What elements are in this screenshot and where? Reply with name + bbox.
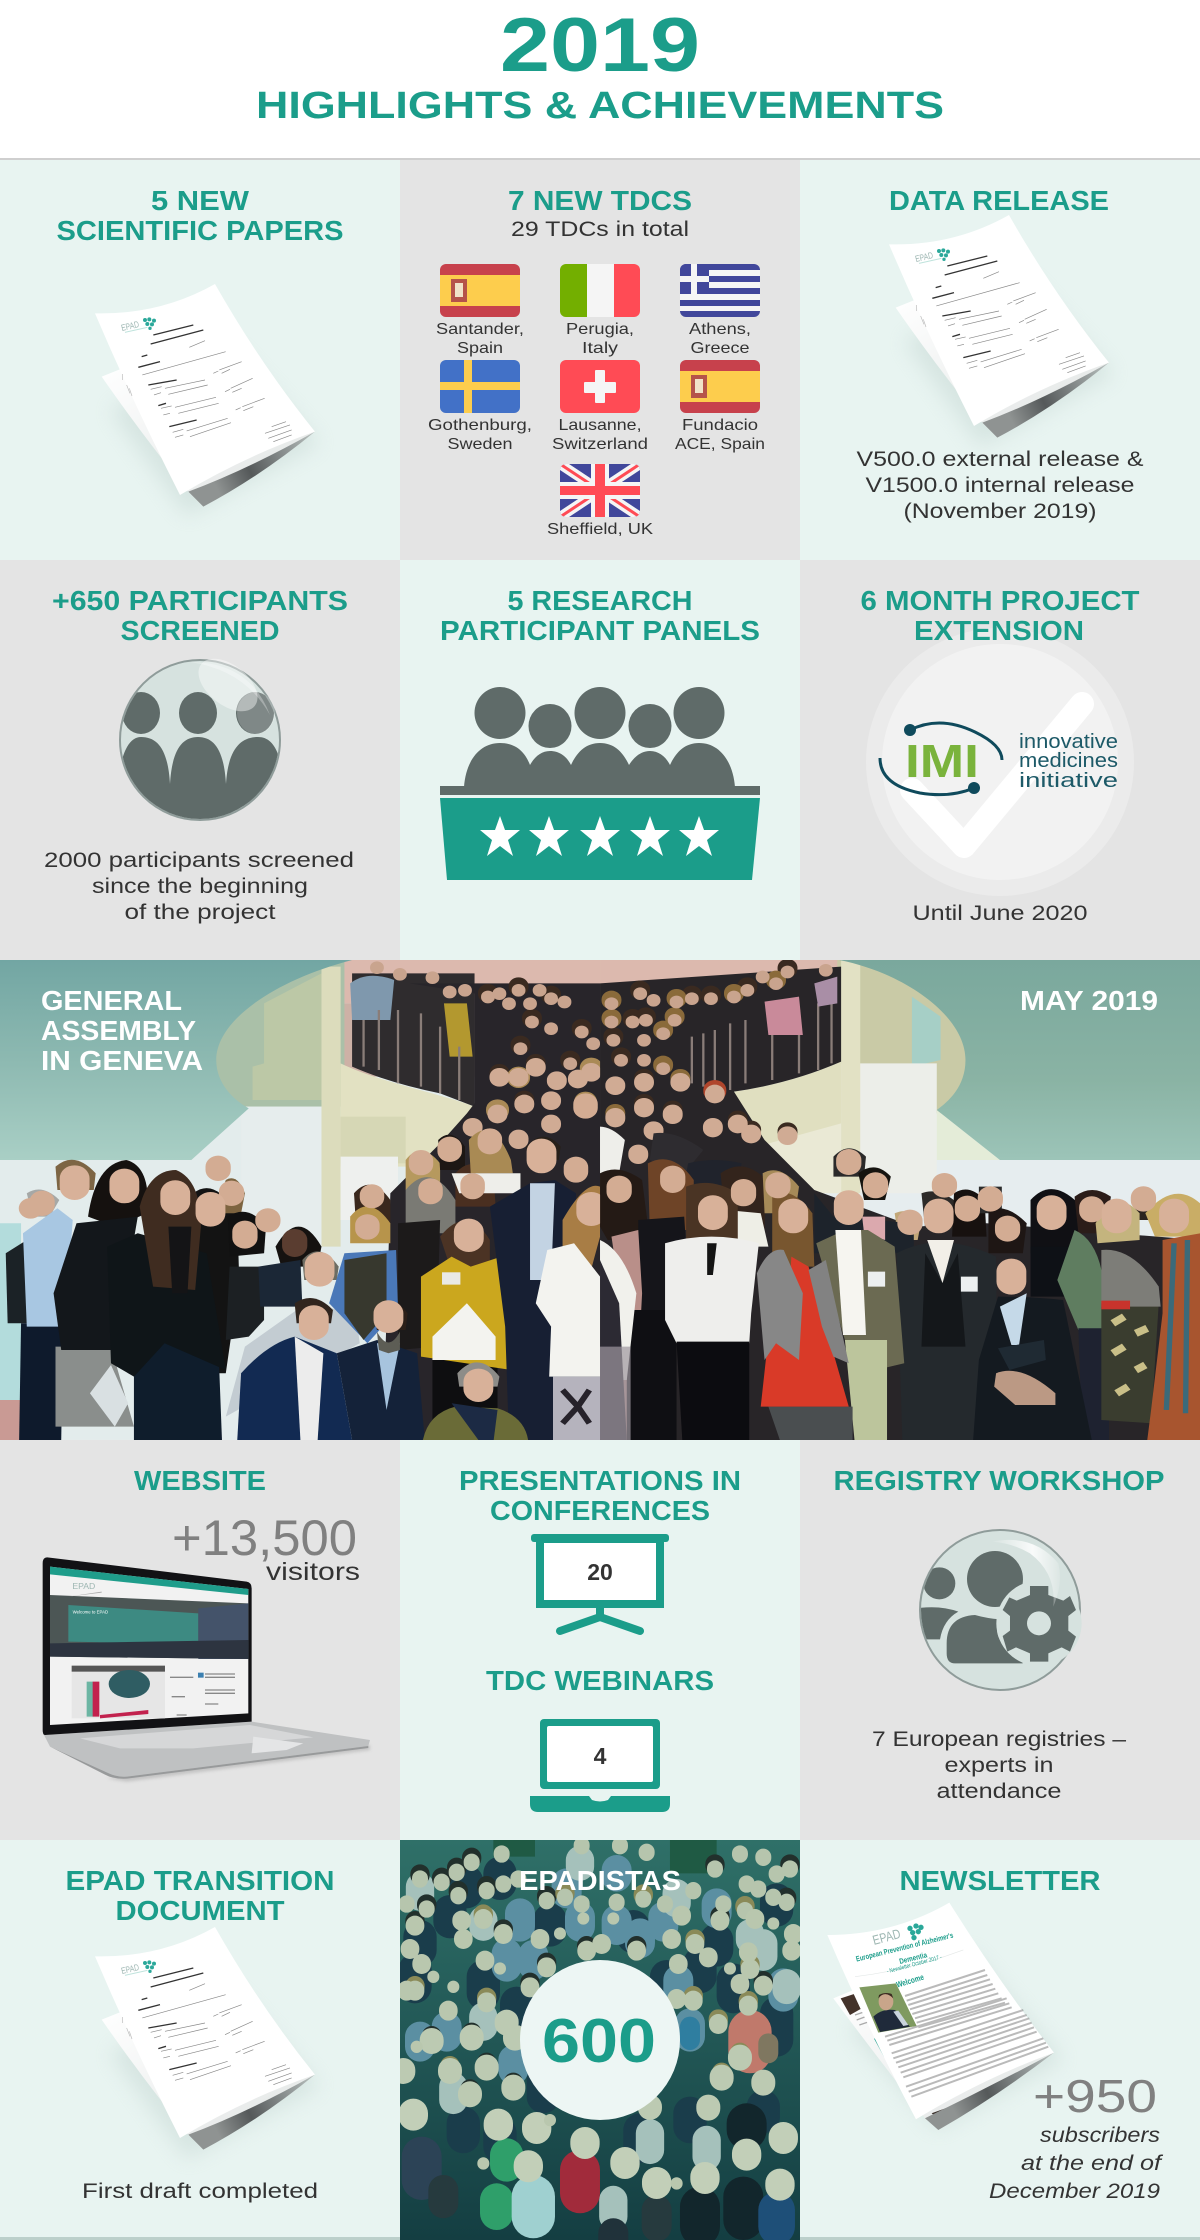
blonde woman patterned dress (1096, 1202, 1140, 1243)
panel: project extension (800, 560, 1200, 960)
hair front right (600, 1170, 650, 1240)
photo caption: general assembly in Geneva: ASSEMBLY (41, 1015, 196, 1046)
red dress woman (772, 1192, 814, 1267)
woman behind (196, 1188, 239, 1374)
logo: innovative medicines initiative: innovative (1019, 731, 1118, 753)
heading: data release: DATA RELEASE (889, 185, 1109, 216)
curly woman striped dress (1145, 1194, 1200, 1237)
panel: research participant panels (400, 560, 800, 960)
photo caption: general assembly in Geneva: GENERAL (41, 985, 182, 1016)
left half (0, 960, 600, 1440)
flag: Sweden (440, 360, 520, 413)
text: European registries: attendance (936, 1780, 1062, 1803)
suit man with waistcoat (897, 1242, 998, 1440)
flag: Spain, Santander (440, 264, 520, 317)
stat: 600 in circle (520, 1960, 680, 2120)
icon: laptop with 4: 4 (594, 1743, 607, 1769)
label: Perugia, Italy: Perugia, (566, 321, 634, 338)
heading: 6 month project extension: EXTENSION (914, 615, 1084, 646)
icon: newsletter pages: EPAD (871, 1926, 902, 1948)
suit man center (490, 1180, 576, 1440)
glasses woman (686, 1182, 738, 1239)
right half (600, 960, 1200, 1440)
panel: EPADistas (400, 1840, 800, 2240)
faces upper (407, 1845, 790, 1911)
shirts middle (600, 1127, 625, 1177)
heading: newsletter: NEWSLETTER (900, 1865, 1100, 1896)
panel: website (0, 1440, 400, 1840)
label: Fundacio ACE, Spain: ACE, Spain (675, 436, 765, 453)
label: Gothenburg, Sweden: Sweden (448, 436, 512, 453)
flag: Switzerland (560, 360, 640, 413)
text: 2000 participants (44, 849, 354, 924)
panel: registry workshop (800, 1440, 1200, 1840)
heading: +650 participants screened: +650 PARTICIPANTS (52, 585, 348, 616)
stat: +950 subscribers: +950 (1033, 2070, 1157, 2122)
stat: +950 subscribers: at the end of (1021, 2152, 1164, 2175)
hair (415, 1857, 790, 2090)
icon: projector screen with 20 (531, 1534, 669, 1631)
heading: 5 new scientific papers (56, 185, 344, 246)
panel: participants screened (0, 560, 400, 960)
heading: EPAD transition document: EPAD TRANSITION (66, 1865, 334, 1896)
label: Gothenburg, Sweden: Gothenburg, (428, 417, 532, 434)
icon: paper document (95, 1927, 320, 2160)
text: release details: V500.0 external release & (856, 448, 1144, 471)
icon: people in glass orb (119, 659, 281, 821)
black-hair woman (88, 1160, 148, 1227)
bodies back right (638, 1216, 686, 1310)
heading: website: WEBSITE (134, 1465, 266, 1496)
seated man (423, 1407, 528, 1440)
faces gallery (611, 970, 826, 1069)
icon: projector screen with 20: 20 (587, 1559, 613, 1585)
label: Fundacio ACE, Spain (675, 417, 765, 453)
title: 2019 (500, 3, 700, 88)
heading: presentations in conferences (459, 1465, 741, 1526)
logo: innovative medicines initiative: initiative (1019, 770, 1118, 792)
icon: newsletter pages: Dementia (898, 1950, 929, 1966)
label: Santander, Spain: Santander, (436, 321, 524, 338)
photo: group portrait on a staircase (0, 960, 1200, 1440)
flag: United Kingdom (560, 464, 640, 517)
shirt man behind front row (226, 1303, 360, 1417)
heading: presentations in conferences: PRESENTATIONS IN (459, 1465, 741, 1496)
flag: Spain, Fundacio ACE (680, 360, 760, 413)
panel: newsletter (800, 1840, 1200, 2240)
cardigan woman (329, 1250, 398, 1343)
icon: newsletter pages: Welcome (895, 1972, 925, 1990)
label: Santander, Spain (436, 321, 524, 357)
stat: +950 subscribers (989, 2070, 1164, 2203)
flag: Italy (560, 264, 640, 317)
text: European registries: 7 European registries – (872, 1728, 1126, 1751)
icon: newsletter pages (827, 1903, 1063, 2130)
label: Lausanne, Switzerland (552, 417, 648, 453)
plaid man (816, 1230, 904, 1370)
heading: 5 new scientific papers: SCIENTIFIC PAPERS (56, 215, 344, 246)
heading: EPADistas: EPADISTAS (519, 1865, 681, 1896)
hair middle left (488, 986, 582, 1101)
heading: 5 research participant panels: PARTICIPANT PANELS (440, 615, 760, 646)
icon: laptop showing website: Welcome to EPAD (73, 1609, 108, 1614)
text: 2000 participants: of the project (124, 901, 276, 924)
label: Gothenburg, Sweden (428, 417, 532, 453)
stat: +950 subscribers: subscribers (1040, 2124, 1161, 2147)
yellow cardigan woman (440, 1221, 490, 1300)
heading: presentations in conferences: CONFERENCES (490, 1495, 710, 1526)
heading: TDC webinars: TDC WEBINARS (486, 1665, 714, 1696)
heading: registry workshop: REGISTRY WORKSHOP (834, 1465, 1164, 1496)
stat: +13,500 visitors: visitors (266, 1558, 360, 1586)
floral woman (1030, 1253, 1066, 1296)
panel: general assembly photo (0, 960, 1200, 1440)
logo: innovative medicines initiative (880, 723, 1118, 795)
label: Santander, Spain: Spain (457, 340, 503, 357)
photo caption: general assembly in Geneva: IN GENEVA (41, 1045, 203, 1076)
mid blue (420, 1870, 783, 2070)
label: Perugia, Italy (566, 321, 634, 357)
heading: 5 research participant panels (440, 585, 760, 646)
stat: +950 subscribers: December 2019 (989, 2180, 1160, 2203)
icon: pale circle with check mark (866, 628, 1134, 896)
icon: paper document: EPAD (120, 319, 140, 333)
faces right (619, 1160, 1143, 1231)
white jacket woman (563, 1186, 600, 1290)
label: Lausanne, Switzerland: Lausanne, (558, 417, 642, 434)
heading: 6 month project extension (860, 585, 1140, 646)
flag: Greece (680, 264, 760, 317)
label: Athens, Greece (689, 321, 751, 357)
text: European registries (872, 1728, 1126, 1803)
panel: EPAD transition document (0, 1840, 400, 2240)
label: Athens, Greece: Athens, (689, 321, 751, 338)
title: HIGHLIGHTS & ACHIEVEMENTS (256, 85, 944, 127)
bearded man (337, 1340, 425, 1440)
subheading: 29 TDCs in total: 29 TDCs in total (511, 218, 689, 241)
text: until June 2020: Until June 2020 (912, 902, 1088, 925)
stat: +13,500 visitors: +13,500 (172, 1510, 357, 1566)
text: 2000 participants: 2000 participants screened (44, 849, 354, 872)
icon: paper document: EPAD (120, 1962, 140, 1976)
far left man (6, 1242, 27, 1324)
stat: 600 in circle: 600 (542, 2007, 656, 2076)
dark suits (415, 1873, 777, 2147)
heading: EPAD transition document: DOCUMENT (116, 1895, 284, 1926)
hair middle (613, 968, 788, 1132)
text: first draft completed: First draft completed (82, 2180, 318, 2203)
crouching man (973, 1297, 1092, 1440)
icon: paper document (95, 284, 320, 517)
label: Sheffield, UK: Sheffield, UK (547, 521, 653, 538)
label: Perugia, Italy: Italy (582, 340, 618, 357)
light (420, 1860, 787, 2217)
icon: newsletter pages: European Prevention of Alzheimer's (855, 1931, 954, 1964)
navy suit man (237, 1337, 352, 1440)
gallery rail and mass (352, 973, 475, 1107)
heading: 6 month project extension: 6 MONTH PROJECT (860, 585, 1140, 616)
faces mid-large (367, 1104, 586, 1229)
title (256, 3, 944, 127)
faces left (42, 1167, 268, 1238)
panel: data release (800, 160, 1200, 560)
label: Athens, Greece: Greece (690, 340, 750, 357)
icon: five people behind a panel with stars (440, 687, 760, 880)
icon: laptop showing website (43, 1557, 370, 1782)
icon: people and gear in glass orb (917, 1530, 1082, 1690)
photo: crowd with teal tint (400, 1840, 800, 2240)
text: release details: V1500.0 internal release (866, 474, 1134, 497)
heading: EPAD transition document (66, 1865, 334, 1926)
logo: innovative medicines initiative: medicines (1019, 750, 1118, 772)
heading: 7 new TDCs: 7 NEW TDCS (508, 185, 692, 216)
panel: 5 new scientific papers (0, 160, 400, 560)
panel: presentations and webinars (400, 1440, 800, 1840)
heading: +650 participants screened (52, 585, 348, 646)
label: Lausanne, Switzerland: Switzerland (552, 436, 648, 453)
logo: innovative medicines initiative: IMI (905, 735, 979, 787)
text: release details (856, 448, 1144, 523)
text: European registries: experts in (944, 1754, 1054, 1777)
hair mid-large (406, 1151, 440, 1190)
icon: newsletter pages: - Newsletter October 2017 - (886, 1955, 943, 1975)
text: release details: (November 2019) (904, 500, 1096, 523)
photo caption: May 2019: MAY 2019 (1020, 985, 1158, 1016)
panel: 7 new TDCs (400, 160, 800, 560)
heading: +650 participants screened: SCREENED (120, 615, 280, 646)
icon: paper document (889, 215, 1114, 448)
photo caption: general assembly in Geneva (41, 985, 203, 1076)
faces gallery left (377, 967, 593, 1064)
text: 2000 participants: since the beginning (92, 875, 308, 898)
long hair woman in black (134, 1340, 222, 1440)
icon: laptop showing website: EPAD (72, 1581, 95, 1591)
icon: paper document: EPAD (914, 250, 934, 264)
label: Fundacio ACE, Spain: Fundacio (682, 417, 758, 434)
heading: 5 research participant panels: 5 RESEARCH (508, 585, 692, 616)
heading: 5 new scientific papers: 5 NEW (151, 185, 250, 216)
raised hands (417, 1918, 773, 2184)
icon: laptop with 4 (530, 1719, 670, 1812)
